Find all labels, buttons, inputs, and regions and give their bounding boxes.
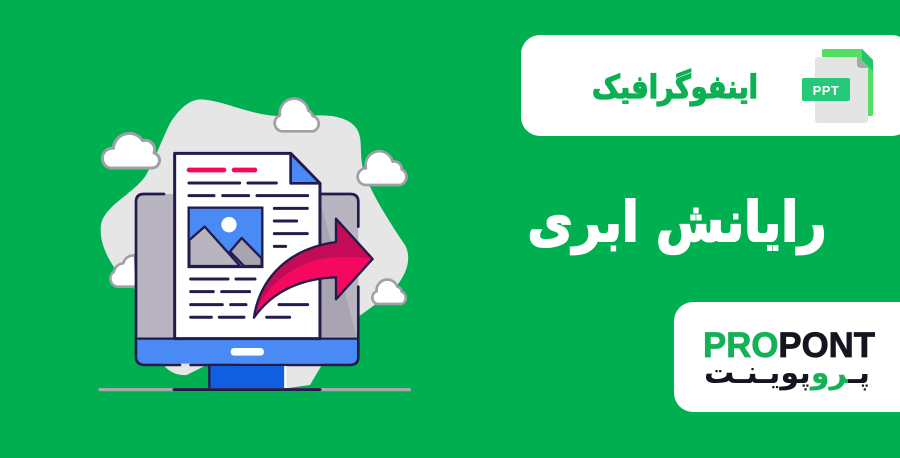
logo latin wordmark: PROPONT [703, 326, 875, 365]
document page [175, 153, 320, 339]
logo persian wordmark: پـروپویـنـت [704, 355, 870, 391]
ground line [100, 385, 409, 395]
cloud right upper [358, 151, 406, 185]
cloud right lower [372, 280, 406, 304]
cloud top left [102, 133, 160, 168]
illustration: monitor with document and arrow [100, 99, 409, 390]
icon label: PPT: PPT [813, 83, 839, 98]
heading: infographic: اینفوگرافیک [592, 68, 758, 106]
monitor screen [136, 194, 358, 340]
title: cloud computing: رایانش ابری [528, 190, 826, 254]
page fold [291, 153, 320, 183]
monitor stand [209, 366, 285, 388]
cloud left lower [110, 255, 137, 287]
monitor outline [136, 194, 358, 365]
monitor bezel [137, 339, 357, 364]
heading lines [189, 163, 255, 177]
monitor button [231, 348, 264, 356]
panel: logo [674, 302, 900, 412]
panel: infographic label [521, 35, 900, 136]
background blob [101, 99, 408, 388]
bezel divider [137, 335, 358, 342]
share arrow [254, 219, 373, 318]
image placeholder [189, 208, 262, 267]
text lines bottom [191, 279, 308, 317]
cloud top center [275, 99, 319, 131]
icon: PPT file [802, 49, 873, 123]
text lines top [189, 183, 308, 246]
